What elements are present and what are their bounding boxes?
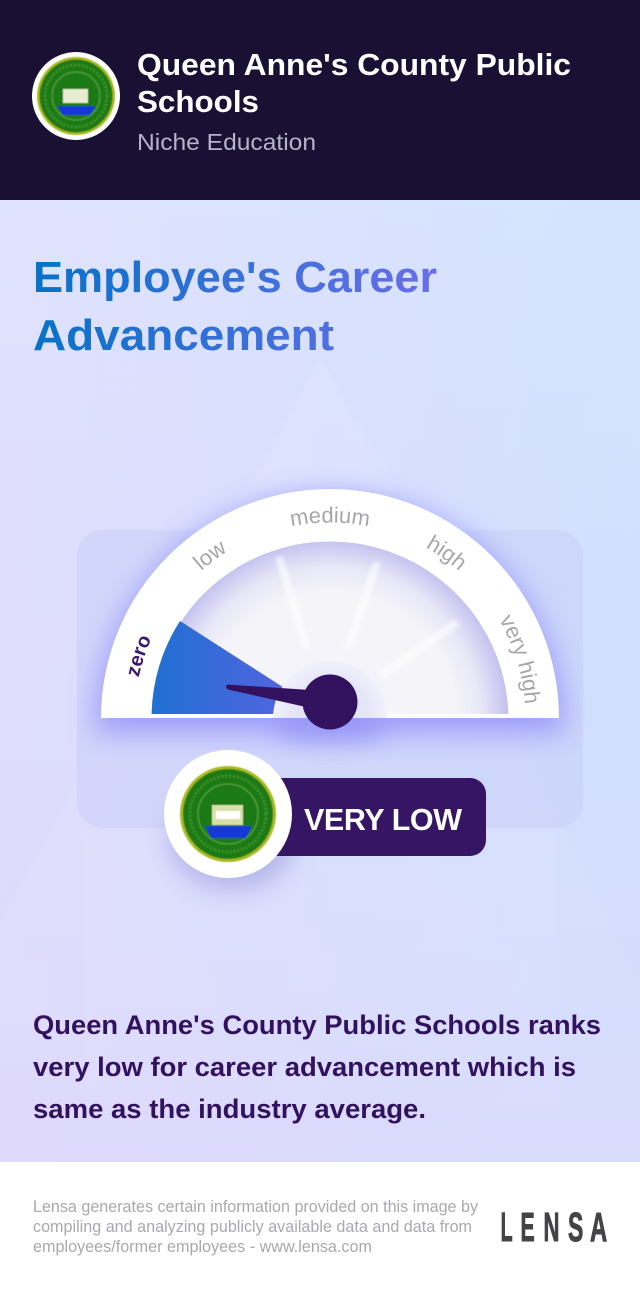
disclaimer text bbox=[33, 1198, 479, 1256]
gauge label: zero: zero bbox=[128, 636, 150, 677]
description text: Queen Anne's County Public Schools ranks bbox=[33, 1010, 601, 1040]
gauge label: high: high bbox=[426, 534, 464, 570]
gauge label: very high: very high bbox=[501, 614, 540, 703]
header title: Queen Anne's County Public bbox=[137, 47, 571, 82]
gauge dial face bbox=[152, 541, 508, 714]
icon: school logo in header bbox=[32, 52, 120, 140]
Lensa wordmark: A bbox=[590, 1206, 607, 1251]
disclaimer text: compiling and analyzing publicly available data and data from bbox=[33, 1218, 472, 1236]
background bbox=[0, 200, 640, 1162]
description text bbox=[33, 1010, 601, 1124]
gauge white ring bbox=[101, 489, 559, 718]
gauge rays bbox=[275, 556, 460, 680]
header title: Schools bbox=[137, 84, 259, 119]
heading: Employee's Career bbox=[33, 253, 437, 302]
gauge label: medium: medium bbox=[290, 506, 369, 526]
gauge needle bbox=[226, 674, 358, 730]
gauge blue wedge: zero segment bbox=[152, 621, 300, 714]
badge: very low rating bbox=[164, 750, 486, 890]
gauge hub halo bbox=[273, 661, 387, 718]
description text: same as the industry average. bbox=[33, 1094, 426, 1124]
gauge label: low: low bbox=[192, 542, 225, 570]
footer bbox=[0, 1162, 640, 1290]
header title bbox=[137, 47, 571, 119]
Lensa wordmark bbox=[501, 1203, 607, 1251]
icon: school logo in badge bbox=[164, 750, 292, 878]
heading bbox=[33, 253, 437, 360]
heading: Advancement bbox=[33, 311, 334, 360]
header band bbox=[0, 0, 640, 200]
Lensa wordmark: E bbox=[520, 1203, 535, 1250]
Lensa wordmark: N bbox=[544, 1204, 559, 1250]
Lensa wordmark: L bbox=[501, 1204, 513, 1250]
panel: gauge backdrop bbox=[77, 530, 583, 828]
rating pill bbox=[262, 778, 486, 856]
rating pill: VERY LOW bbox=[304, 803, 462, 837]
chart: gauge bbox=[82, 478, 578, 756]
Lensa wordmark: S bbox=[568, 1205, 583, 1251]
description text: very low for career advancement which is bbox=[33, 1052, 576, 1082]
disclaimer text: employees/former employees - www.lensa.com bbox=[33, 1238, 372, 1256]
disclaimer text: Lensa generates certain information provided on this image by bbox=[33, 1198, 479, 1216]
header subtitle: Niche Education bbox=[137, 129, 316, 155]
